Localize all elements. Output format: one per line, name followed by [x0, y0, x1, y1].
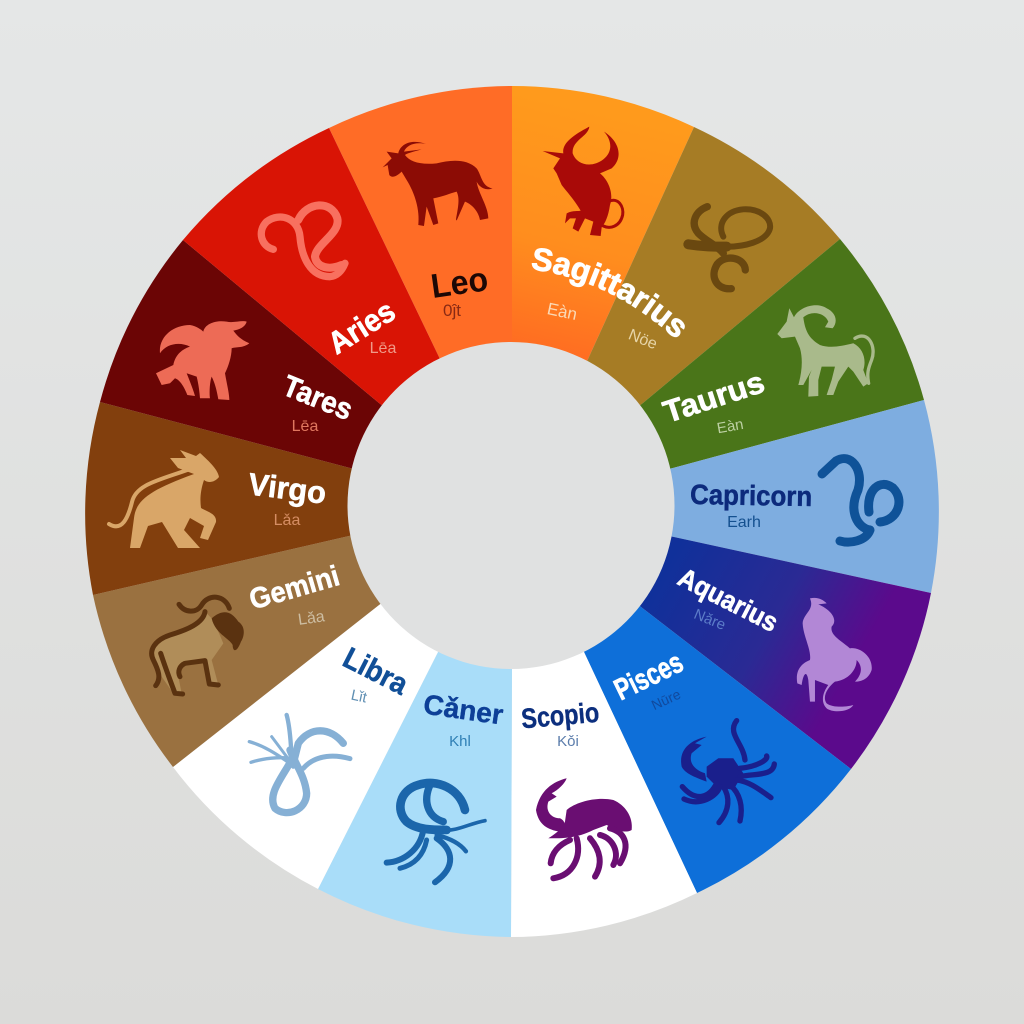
segment: olive sector — [511, 127, 840, 505]
label: Taurus: Taurus — [659, 364, 769, 430]
icon: Aries symbol — [261, 205, 345, 277]
sublabel: Tares: Lēa — [292, 418, 318, 435]
sublabel: Aries: Lēa — [370, 340, 396, 357]
sublabel: Scorpio: Kǒi — [557, 733, 579, 750]
segment: Leo — [329, 86, 512, 505]
sublabel: Capricorn: Earh — [727, 514, 761, 531]
segment: Gemini — [93, 505, 511, 767]
sublabel: Sagittarius: Eàn — [545, 299, 579, 324]
sublabel: Taurus: Eàn — [716, 416, 745, 437]
label: Aquarius: Aquarius — [673, 562, 783, 638]
segment: Virgo — [85, 402, 511, 595]
sublabel: Gemini: Lǎa — [297, 608, 326, 629]
icon: Pisces crab — [681, 721, 774, 823]
sublabel: Cancer: Khl — [449, 733, 471, 750]
label: Tares: Tares — [278, 369, 357, 427]
sublabel: Libra: Lǐt — [349, 687, 369, 707]
label: Gemini: Gemini — [246, 560, 343, 616]
segment: Cancer — [318, 505, 512, 937]
label: Capricorn: Capricorn — [690, 479, 812, 512]
sublabel: Aquarius: Nǎre — [691, 606, 728, 634]
label: Leo: Leo — [429, 260, 490, 306]
icon: Scorpio crab — [536, 778, 632, 878]
icon: Aquarius creature — [797, 598, 872, 711]
icon: Gemini ram — [152, 597, 244, 694]
icon: Libra symbol — [249, 715, 350, 813]
sublabel: Leo: 0ĵt — [443, 301, 461, 320]
segment: Scorpio — [511, 505, 697, 937]
label: Aries: Aries — [322, 293, 401, 361]
label: Libra: Libra — [338, 641, 413, 702]
segment: Pisces — [511, 505, 851, 893]
icon: Tares bull — [156, 321, 249, 400]
icon: Taurus goat — [777, 305, 873, 397]
icon: Virgo horse — [109, 450, 219, 548]
segment: Aries — [183, 128, 511, 505]
sublabel: Virgo: Lǎa — [274, 512, 300, 529]
segment: Tares — [100, 240, 511, 505]
label: Scorpio: Scopio — [520, 697, 600, 734]
segment: Taurus — [511, 239, 924, 505]
icon: Sagittarius bull — [543, 127, 623, 236]
label: Sagittarius: Sagittarius — [532, 248, 685, 338]
segment: Sagittarius — [511, 86, 694, 505]
sublabel: olive sector: Nöe — [626, 326, 660, 353]
icon: Leo goat — [383, 142, 493, 226]
segment: Aquarius — [511, 505, 931, 769]
icon: Cancer symbol — [387, 783, 485, 882]
icon: Capricorn serpent — [822, 459, 899, 542]
sublabel: Pisces: Nūre — [649, 686, 683, 713]
label: Cancer: Cǎner — [422, 689, 505, 731]
label: Pisces: Pisces — [609, 646, 688, 707]
segment: Libra — [173, 505, 511, 889]
center hole — [348, 342, 674, 669]
icon: olive sector glyph — [688, 207, 770, 289]
label: Virgo: Virgo — [246, 466, 328, 511]
segment: Capricorn — [511, 400, 939, 593]
